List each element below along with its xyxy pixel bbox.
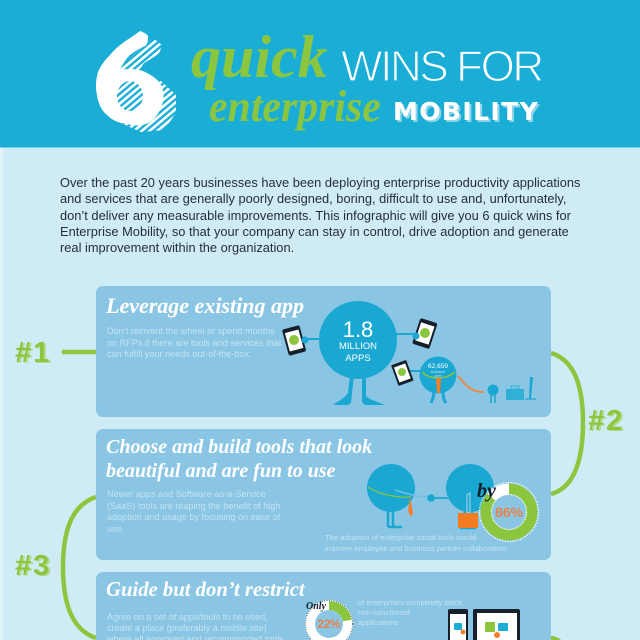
intro paragraph: real improvement within the organization. [60,240,294,255]
illustration: handshake and donut [367,464,540,542]
intro paragraph: and services that are generally poorly designed, boring, difficult to use and, unfortunately, [60,191,566,206]
intro paragraph [60,175,580,255]
description: adoption and usage by focusing on ease of [107,512,280,522]
description: use. [107,524,124,534]
small circle character: APPS [434,374,442,378]
large circle character: MILLION [339,341,377,352]
panel: leverage existing app [96,286,551,417]
description [107,326,282,359]
large circle character: APPS [345,353,371,364]
panel: guide but don't restrict [96,572,551,640]
left edge strip [0,148,3,640]
intro paragraph: Enterprise Mobility, so that your company can stay in control, drive adoption and generate [60,224,569,239]
title: WINS FOR: WINS FOR [341,42,542,91]
intro paragraph: Over the past 20 years businesses have been deploying enterprise productivity applications [60,175,580,190]
intro paragraph: don’t deliver any measurable improvements. This infographic will give you 6 quick wins for [60,208,571,223]
step number 1: #1 [15,337,51,369]
description: Agree on a set of apps/tools to be used, [107,612,268,622]
donut chart 22%: 22% [317,619,341,631]
stat text: of enterprises completely block [358,598,462,607]
tablet [473,609,520,640]
heading: beautiful and are fun to use [106,460,335,482]
word: by: by [477,480,496,502]
description: Newer apps and Software-as-a-Service [107,489,266,499]
heading [106,436,372,482]
panel: beautiful tools [96,429,551,560]
tablet [391,360,422,386]
title: quick: quick [191,24,328,90]
stat text [358,598,462,627]
title: MOBILITY: MOBILITY [393,97,539,126]
donut chart 86% [480,482,538,542]
donut chart 22% [305,600,353,640]
illustration: donut and devices [305,600,520,640]
description [107,612,284,640]
left phone [282,325,322,356]
step number 2: #2 [588,405,624,437]
illustration: app characters [282,301,536,405]
small circle character: 62,659 [428,363,448,370]
description: create a place (preferably a mobile site) [107,623,267,633]
heading: Choose and build tools that look [106,436,372,458]
stat text: applications [358,618,398,627]
heading: Leverage existing app [106,293,304,318]
donut chart 86%: 86% [495,504,524,520]
leash and small icons [458,376,536,403]
caption: improve employee and business partner collaboration [325,544,506,552]
handshake [395,490,448,502]
phone [448,609,468,640]
small circle character [420,356,456,403]
description: (SaaS) tools are reaping the benefit of high [107,501,280,511]
small circle character: BUSINESS [431,370,445,374]
large circle character: 1.8 [343,317,373,342]
word: Only: Only [306,601,327,612]
description: can fulfill your needs out-of-the-box. [107,349,252,359]
large circle character [319,301,397,405]
heading: Guide but don’t restrict [106,579,305,601]
right character with briefcase [446,464,494,528]
caption: The adoption of enterprise social tools would [325,533,476,542]
description: Don’t reinvent the wheel or spend months [107,326,275,336]
step number 3: #3 [15,550,51,582]
left character [367,464,415,527]
caption [325,533,506,552]
title numeral 6 [96,31,176,132]
title: enterprise: enterprise [209,82,381,131]
right phone [396,318,438,349]
description: on RFPs if there are tools and services that [107,338,281,348]
stat text: non-sanctioned [358,608,410,617]
header band [0,0,640,148]
description [107,489,280,534]
